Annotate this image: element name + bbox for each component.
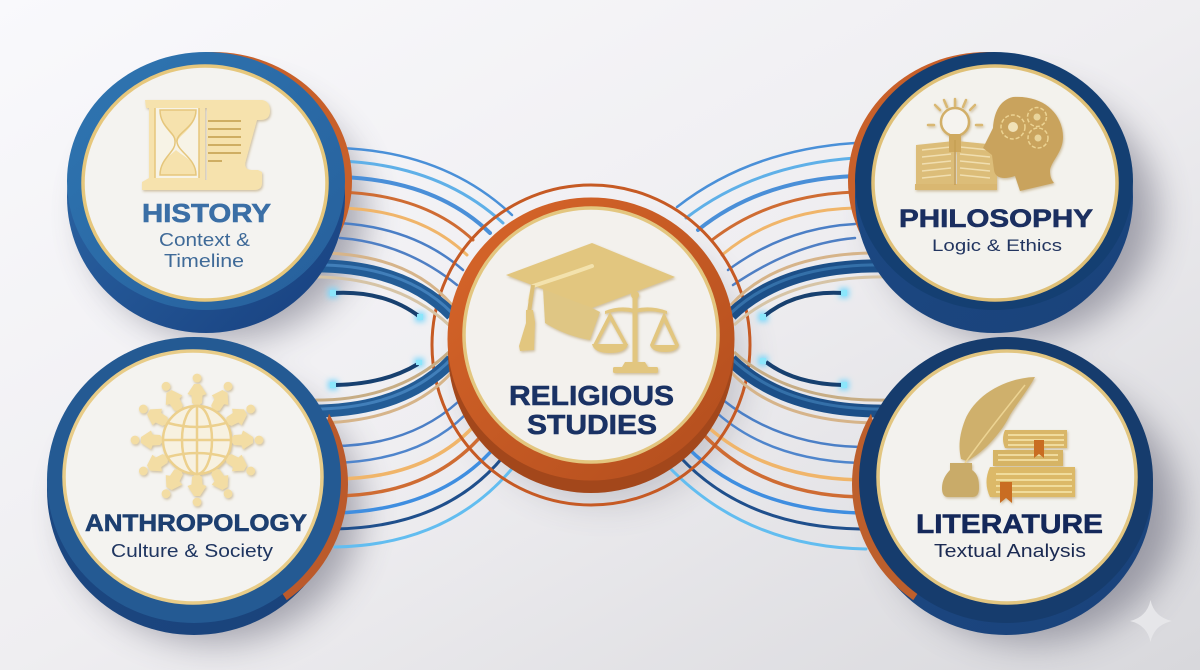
disk: Literature [852, 337, 1153, 635]
drop shadows [68, 89, 1178, 642]
icon: graduation cap and scales [506, 243, 679, 373]
icon: hourglass and scroll [142, 100, 270, 190]
Philosophy subtitle: Logic & Ethics [932, 236, 1062, 255]
hub title: RELIGIOUS [509, 380, 674, 411]
connector pipes: right [731, 253, 890, 423]
Philosophy title: PHILOSOPHY [899, 205, 1093, 233]
icon: book, bulb and head [915, 97, 1063, 191]
History subtitle: Timeline [164, 251, 244, 271]
Literature subtitle: Textual Analysis [934, 541, 1086, 561]
disk: History [67, 52, 352, 333]
History subtitle [159, 230, 250, 271]
connector pipes: left [305, 253, 452, 423]
disk: Philosophy [848, 52, 1133, 333]
disk: Anthropology [47, 337, 348, 635]
hub: Religious Studies [448, 198, 734, 493]
hub title: STUDIES [527, 409, 657, 440]
hub title [509, 380, 674, 440]
icon: quill, ink and books [942, 377, 1075, 503]
inner glowing arcs: right [758, 288, 849, 390]
icon: sparkle watermark [1130, 600, 1172, 642]
Anthropology subtitle: Culture & Society [111, 541, 273, 561]
Anthropology title: ANTHROPOLOGY [85, 510, 307, 537]
History subtitle: Context & [159, 230, 250, 250]
connector arcs: upper right [677, 143, 855, 285]
inner glowing arcs: left [328, 288, 425, 390]
connector arcs: lower left [335, 402, 515, 547]
icon: globe with people [131, 374, 263, 506]
thin orange outer ring of hub [432, 185, 750, 505]
connector arcs: lower right [667, 400, 866, 549]
connector arcs: upper left [340, 148, 512, 285]
Literature title: LITERATURE [916, 509, 1103, 539]
History title: HISTORY [142, 198, 271, 228]
